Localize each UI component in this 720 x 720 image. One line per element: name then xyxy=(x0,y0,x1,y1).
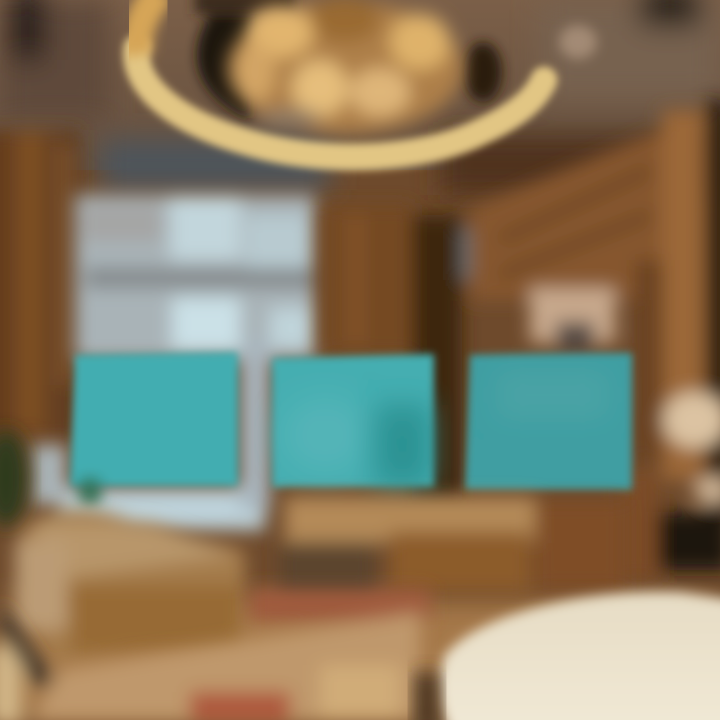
gold ring xyxy=(137,48,544,157)
center seating and table xyxy=(280,497,625,598)
rug and floor xyxy=(0,590,430,720)
teal panel 1 xyxy=(70,352,238,506)
ceiling shadows xyxy=(0,0,720,195)
teal panel 2 xyxy=(272,354,434,487)
left curtain xyxy=(0,130,80,440)
window xyxy=(32,195,315,530)
foreground white ottoman xyxy=(439,592,720,720)
dark recess xyxy=(195,0,502,120)
ring top, orange part xyxy=(137,0,160,55)
ceiling light fixture xyxy=(137,0,597,157)
ottoman shadow xyxy=(415,672,439,720)
left sofa xyxy=(15,509,245,665)
central ornament xyxy=(227,0,463,134)
plant xyxy=(0,430,28,526)
ceiling spot xyxy=(559,25,597,59)
teal panel 3 xyxy=(465,353,632,490)
wooden pillar and shelves xyxy=(322,100,720,580)
